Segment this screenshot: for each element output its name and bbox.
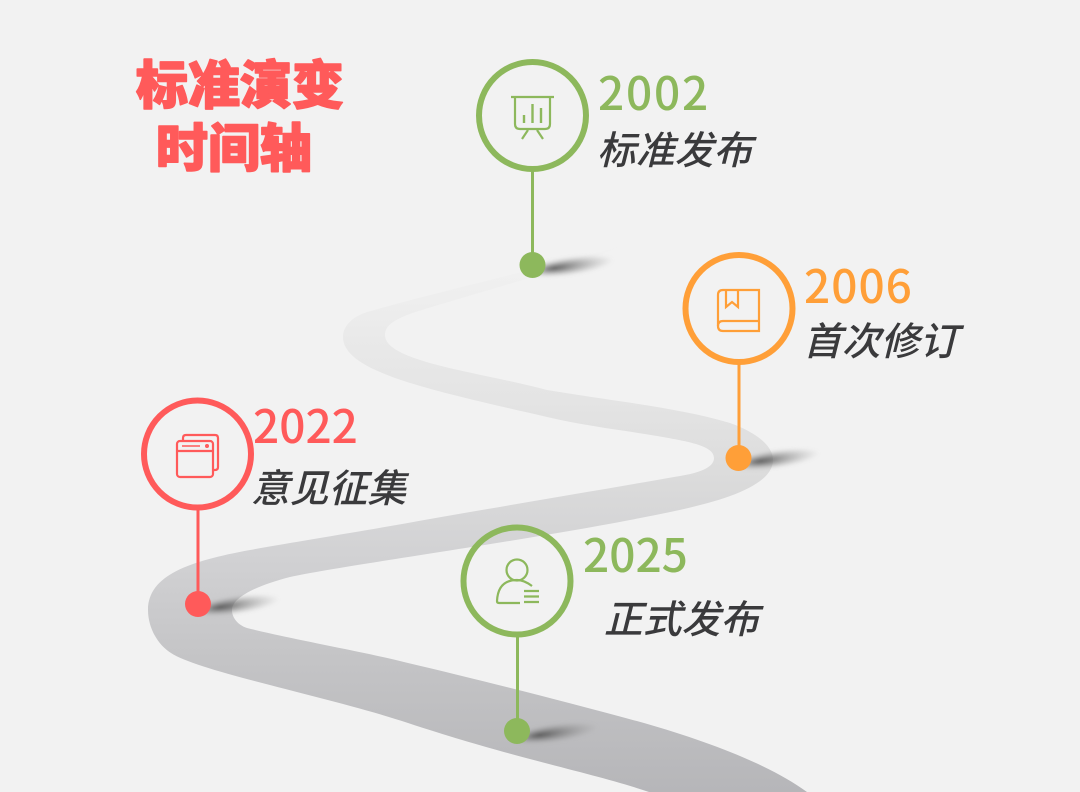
title: 标准演变 [136,58,344,116]
label: 首次修订: 首次修订 [803,321,964,364]
marker dot: 2006 [726,445,752,471]
title: 时间轴 [156,121,312,179]
milestone: 2022 [144,391,409,620]
milestone: 2006 [686,251,964,474]
shadow: 2002 [525,251,615,281]
ring: 2002 [479,62,586,169]
year: 2006: 2006 [804,251,913,317]
winding road [148,240,807,792]
connector: 2025 [516,635,519,726]
ring: 2006 [686,255,792,362]
icon: book [718,290,759,331]
title [136,58,344,179]
year: 2002: 2002 [598,58,710,124]
icon: stacked windows [177,435,218,477]
shadow: 2022 [191,590,281,620]
milestone: 2025 [464,520,764,748]
marker dot: 2002 [520,252,546,278]
shadow: 2025 [510,718,600,748]
year: 2025: 2025 [583,520,688,586]
label: 意见征集: 意见征集 [251,468,409,511]
marker dot: 2022 [185,591,211,617]
marker dot: 2025 [504,718,530,744]
ring: 2025 [464,528,570,634]
milestone: 2002 [479,58,757,281]
year: 2022: 2022 [253,391,358,457]
label: 正式发布: 正式发布 [604,599,764,642]
icon: user with list [497,560,539,603]
label: 标准发布: 标准发布 [597,130,757,173]
shadow: 2006 [731,444,821,474]
icon: presentation board [511,97,554,139]
connector: 2006 [738,362,740,453]
ring: 2022 [144,400,251,508]
connector: 2022 [196,508,200,599]
connector: 2002 [531,170,534,260]
